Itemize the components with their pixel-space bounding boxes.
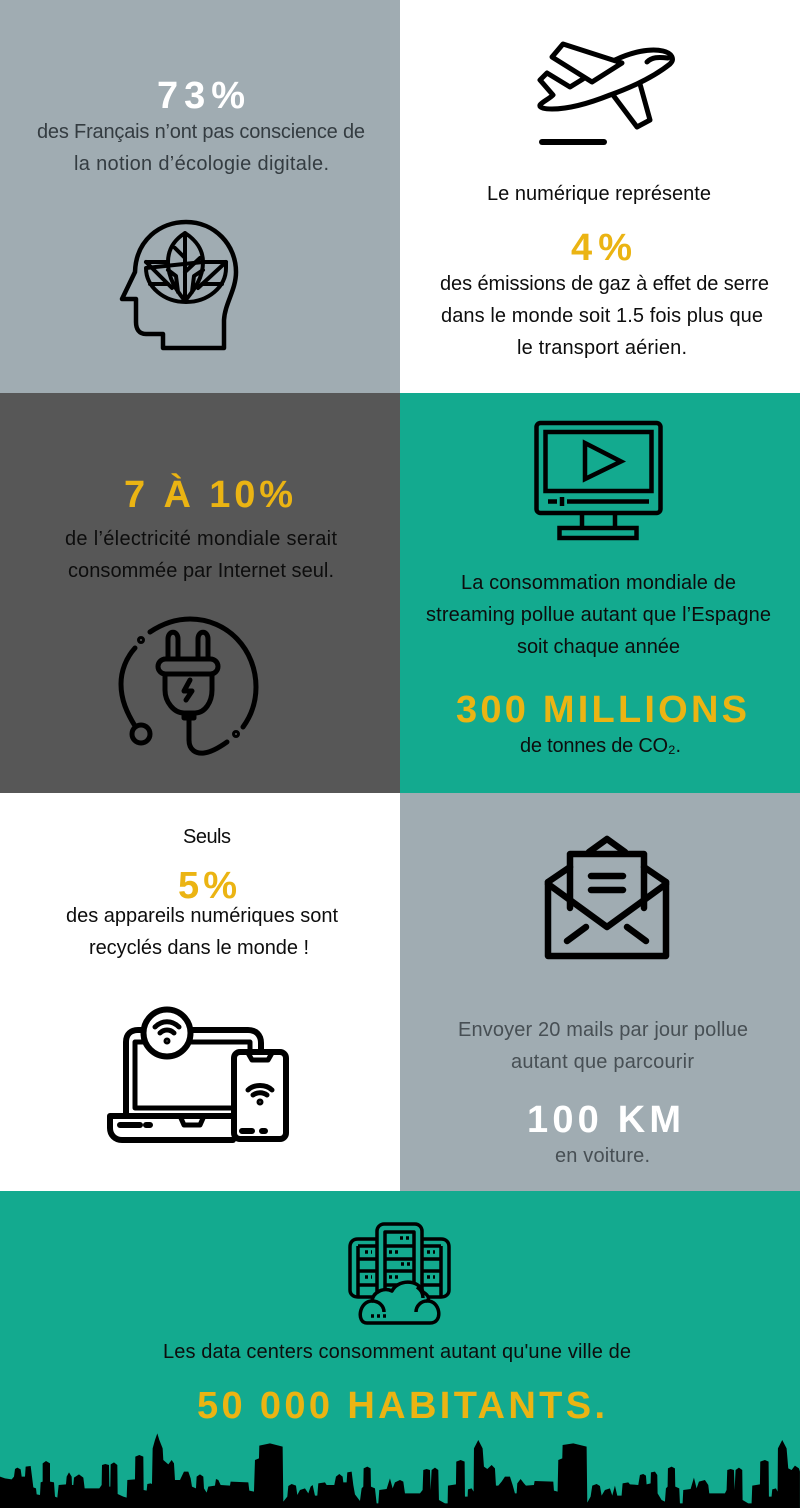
text: greenhouse gas emissions: des émissions de gaz à effet de serre xyxy=(440,273,769,295)
text: digital represents: Le numérique représente xyxy=(487,183,711,205)
text: streaming comparison with Spain: La consommation mondiale de xyxy=(461,572,736,594)
text: only: Seuls xyxy=(183,826,231,848)
statistic: 50 000 inhabitants: 50 000 HABITANTS. xyxy=(197,1385,605,1427)
text: streaming comparison with Spain xyxy=(426,572,771,658)
text: greenhouse gas emissions xyxy=(440,273,769,359)
text: world electricity: de l’électricité mondiale serait xyxy=(65,528,337,550)
text: world electricity: consommée par Internet seul. xyxy=(68,560,334,582)
text: recycled devices: des appareils numériques sont xyxy=(66,905,338,927)
icon: airplane taking off xyxy=(540,44,672,142)
text: streaming comparison with Spain: streaming pollue autant que l’Espagne xyxy=(426,604,771,626)
text: sending 20 emails xyxy=(458,1019,748,1073)
icon: video monitor xyxy=(536,423,660,538)
text: sending 20 emails: Envoyer 20 mails par jour pollue xyxy=(458,1019,748,1041)
statistic: 300 millions: 300 MILLIONS xyxy=(456,689,747,731)
icon: laptop and smartphone with wifi xyxy=(110,1010,286,1140)
text: recycled devices: recyclés dans le monde ! xyxy=(89,937,309,959)
skyline silhouette xyxy=(0,1433,800,1508)
text: tons of CO2: de tonnes de CO₂. xyxy=(520,735,681,757)
text: awareness of digital ecology: la notion d’écologie digitale. xyxy=(74,153,329,175)
text: greenhouse gas emissions: dans le monde soit 1.5 fois plus que xyxy=(441,305,763,327)
panel: digital share of greenhouse gases xyxy=(400,0,800,393)
statistic: 4%: 4% xyxy=(571,227,632,269)
statistic: 5%: 5% xyxy=(178,865,237,907)
text: data centers consumption: Les data centers consomment autant qu'une ville de xyxy=(163,1341,631,1363)
panel: email pollution xyxy=(400,793,800,1191)
text: greenhouse gas emissions: le transport aérien. xyxy=(517,337,687,359)
statistic: 100 km: 100 KM xyxy=(527,1099,681,1141)
text: recycled devices xyxy=(66,905,338,959)
text: sending 20 emails: autant que parcourir xyxy=(511,1051,694,1073)
icon: open envelope with letter xyxy=(548,839,666,956)
panel: streaming pollution xyxy=(400,393,800,793)
text: by car: en voiture. xyxy=(555,1145,650,1167)
statistic: 73%: 73% xyxy=(157,75,245,117)
icon: head with leaves xyxy=(122,222,236,348)
panel: data centers xyxy=(0,1191,800,1508)
panel: 73% of French people xyxy=(0,0,400,393)
text: awareness of digital ecology: des Français n’ont pas conscience de xyxy=(37,121,365,143)
icon: server racks with cloud xyxy=(350,1224,449,1323)
text: awareness of digital ecology xyxy=(37,121,365,175)
text: world electricity xyxy=(65,528,337,582)
icon: electric plug xyxy=(121,619,256,753)
text: streaming comparison with Spain: soit chaque année xyxy=(517,636,680,658)
statistic: 7 à 10%: 7 À 10% xyxy=(124,472,293,516)
panel: electricity consumed by internet xyxy=(0,393,400,793)
panel: device recycling xyxy=(0,793,400,1191)
